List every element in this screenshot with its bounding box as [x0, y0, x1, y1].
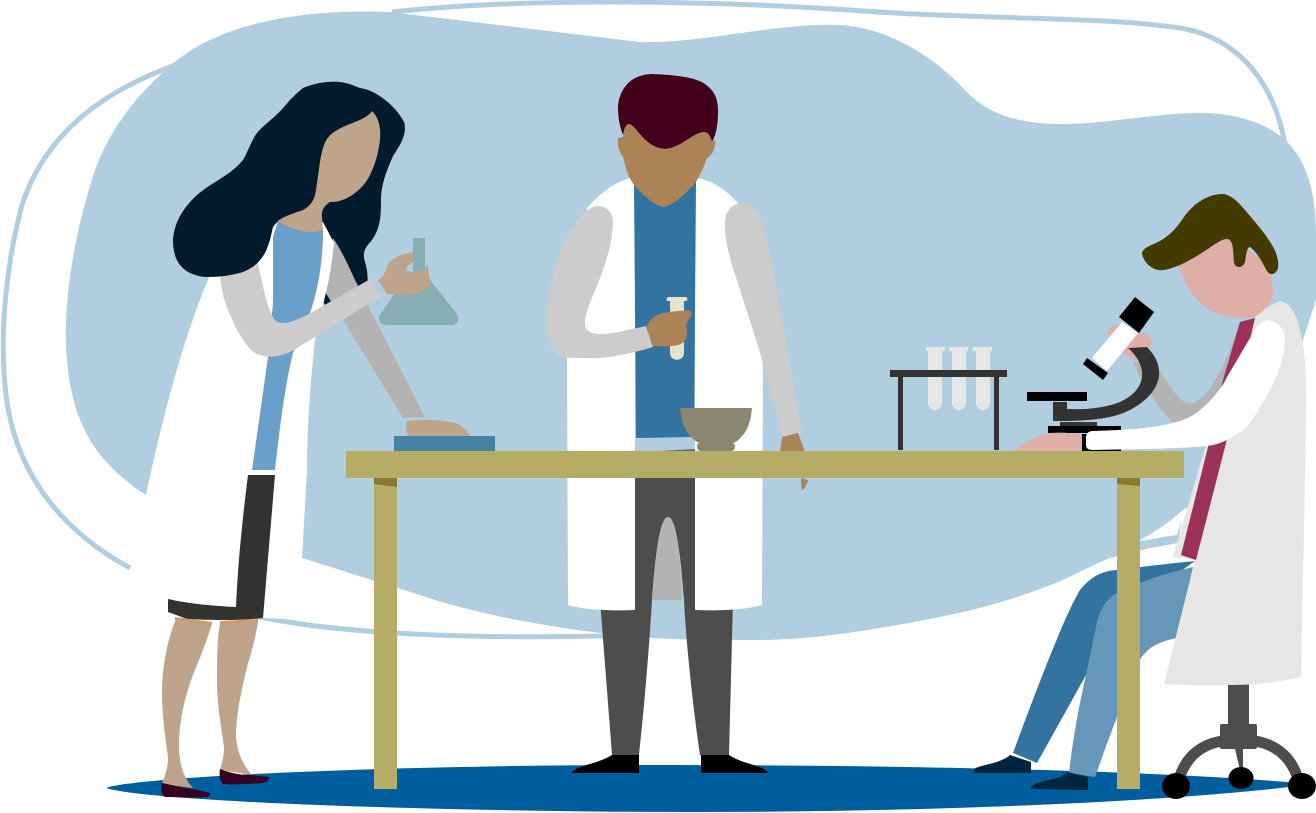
- microscope: [1027, 297, 1159, 451]
- hand on flask: [378, 252, 430, 295]
- hair: [1142, 194, 1278, 274]
- shoes: [572, 755, 768, 773]
- legs: [162, 619, 258, 788]
- shirt: [634, 182, 696, 438]
- lab coat: [567, 178, 763, 610]
- hand on table: [1015, 433, 1082, 451]
- dark trouser leg: [1013, 561, 1195, 763]
- front arm: [220, 260, 380, 357]
- right arm: [725, 203, 802, 437]
- mortar bowl: [680, 408, 752, 451]
- tie: [1181, 318, 1255, 560]
- shoes: [974, 755, 1088, 790]
- coat body: [1164, 301, 1306, 685]
- chair: [1162, 683, 1316, 799]
- trousers: [600, 470, 733, 755]
- white sliver over blob: [1140, 508, 1185, 541]
- face and ears: [618, 124, 715, 207]
- book: [394, 436, 495, 451]
- knee bands: [175, 617, 258, 625]
- cuff: [1082, 434, 1092, 451]
- hand with test tube: [646, 310, 692, 346]
- back arm: [1133, 322, 1240, 423]
- background blob: [66, 11, 1316, 640]
- flask: [379, 238, 458, 325]
- skirt: [168, 475, 275, 620]
- background outline stroke: [3, 2, 1285, 637]
- test tube rack: [890, 347, 1007, 450]
- back arm: [325, 238, 425, 418]
- scientist: man standing: [547, 74, 808, 773]
- scientist: woman: [130, 82, 495, 797]
- gap behind legs: [652, 517, 682, 600]
- hair: [618, 74, 718, 149]
- face: [1177, 235, 1273, 318]
- ground shadow: [106, 765, 1312, 812]
- dress: [252, 221, 323, 470]
- left arm: [547, 206, 653, 358]
- hair back: [290, 82, 405, 305]
- scientist: man seated: [974, 194, 1316, 799]
- trouser waist sliver: [660, 449, 695, 451]
- light trouser leg: [1069, 567, 1193, 777]
- hand on book: [406, 420, 470, 436]
- front arm: [1086, 320, 1285, 450]
- hair front: [173, 82, 345, 277]
- right hand: [780, 433, 808, 490]
- lab coat: [130, 220, 334, 620]
- table: [346, 451, 1184, 789]
- shoes: [161, 769, 269, 797]
- back hand: [1107, 324, 1152, 361]
- face and neck: [278, 111, 380, 232]
- test tube: [666, 297, 688, 360]
